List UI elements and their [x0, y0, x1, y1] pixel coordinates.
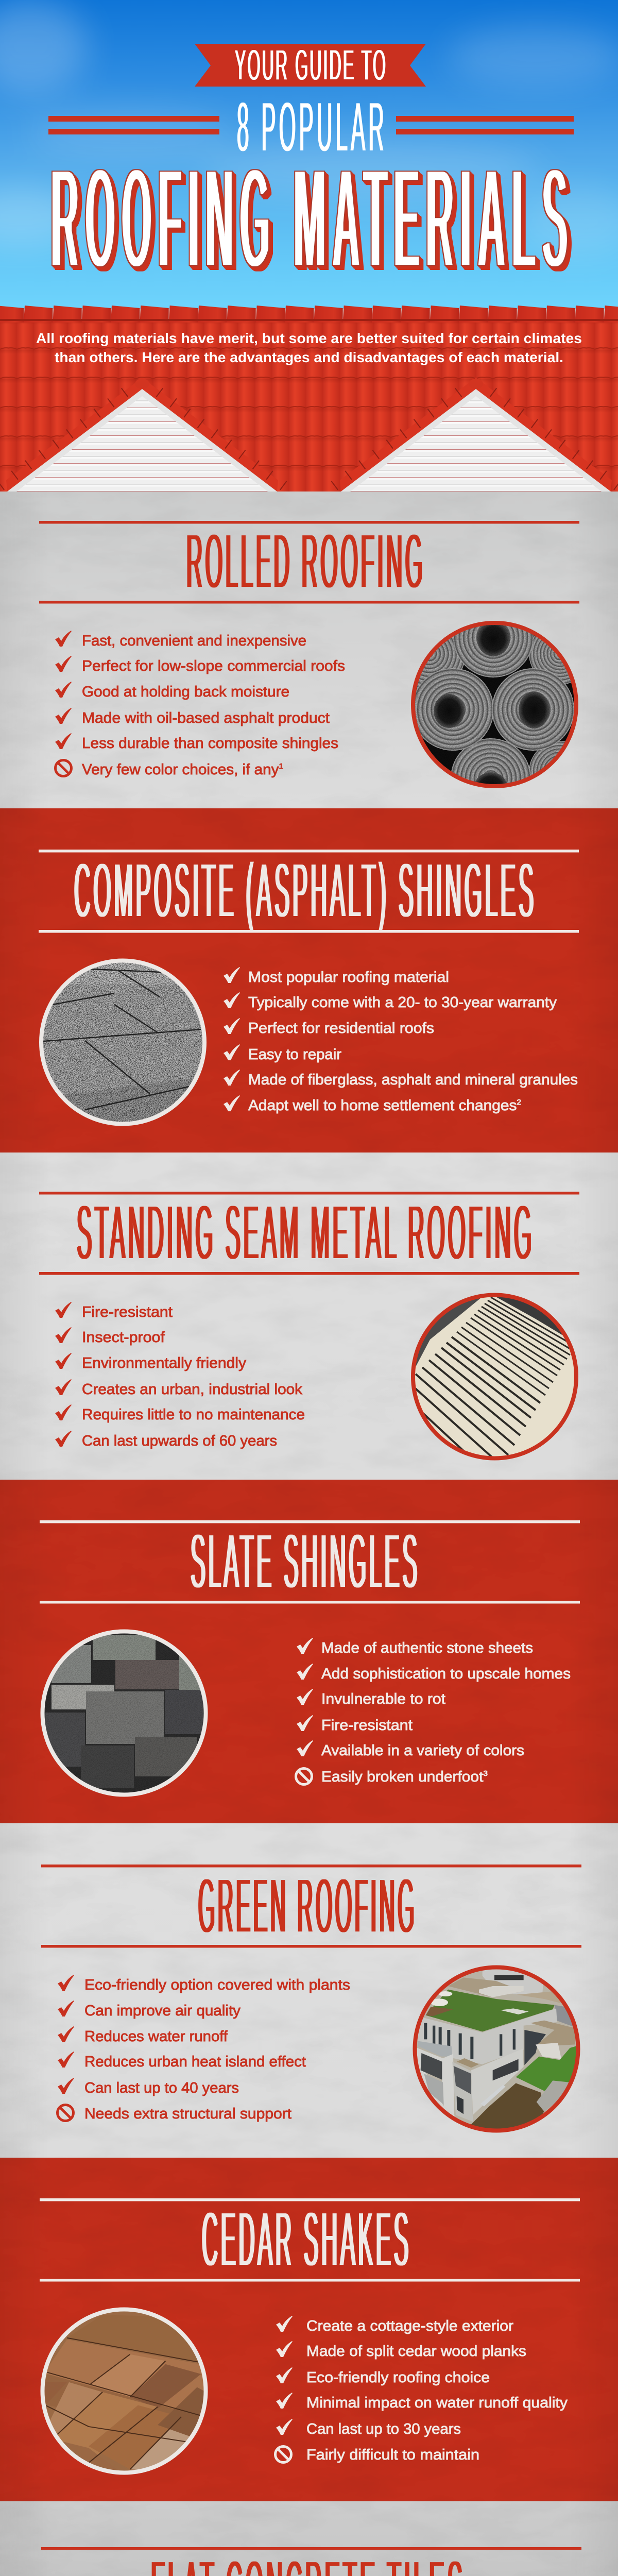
list: composite shingles pros: Perfect for residential roofs	[248, 1020, 434, 1037]
photo: standing seam metal	[411, 1293, 578, 1460]
list: standing seam pros: Insect-proof	[82, 1329, 165, 1346]
panel: sky header	[0, 0, 618, 309]
panel: cedar shakes	[40, 2195, 580, 2479]
list: green roofing pros and cons: Reduces water runoff	[84, 2028, 228, 2045]
list: rolled roofing pros and cons: Less durable than composite shingles	[82, 735, 338, 752]
panel: flat concrete tiles	[41, 2544, 583, 2576]
list: slate pros and cons: Fire-resistant	[321, 1717, 413, 1734]
intro text	[36, 330, 582, 365]
list: green roofing pros and cons: Can last up to 40 years	[84, 2080, 239, 2096]
heading: rolled roofing	[39, 517, 579, 604]
list: slate pros and cons: Add sophistication to upscale homes	[321, 1666, 571, 1682]
panel: slate shingles	[40, 1517, 580, 1797]
list: green roofing pros and cons: Can improve air quality	[84, 2003, 241, 2019]
list: standing seam pros: Can last upwards of 60 years	[82, 1433, 277, 1449]
list: green roofing pros and cons	[58, 1975, 350, 2122]
list: standing seam pros: Fire-resistant	[82, 1304, 173, 1320]
list: composite shingles pros: Made of fiberglass, asphalt and mineral granules	[248, 1072, 578, 1088]
list: rolled roofing pros and cons: Perfect for low-slope commercial roofs	[82, 658, 345, 674]
photo: slate tiles	[41, 1630, 208, 1797]
list: rolled roofing pros and cons: Fast, convenient and inexpensive	[82, 633, 306, 649]
title: 8 popular with side rules	[48, 88, 574, 166]
list: rolled roofing pros and cons: 1	[279, 762, 283, 771]
heading: slate shingles	[40, 1517, 580, 1604]
heading: cedar shakes	[40, 2195, 580, 2282]
list: slate pros and cons: Easily broken underfoot	[321, 1769, 478, 1785]
list: cedar shakes pros and cons: Fairly difficult to maintain	[306, 2447, 479, 2463]
list: cedar shakes pros and cons	[275, 2316, 568, 2463]
list: cedar shakes pros and cons: Can last up to 30 years	[306, 2421, 461, 2437]
photo: cedar shakes	[40, 2305, 209, 2479]
photo: rolled roofing	[411, 621, 578, 788]
list: green roofing pros and cons: Eco-friendly option covered with plants	[84, 1977, 350, 1993]
list: rolled roofing pros and cons: Good at holding back moisture	[82, 684, 289, 700]
list: cedar shakes pros and cons: Eco-friendly roofing choice	[306, 2369, 490, 2386]
list: slate pros and cons: 3	[483, 1769, 488, 1778]
photo: green roof building	[407, 1960, 585, 2138]
list: slate pros and cons	[296, 1638, 571, 1785]
list: composite shingles pros: Most popular roofing material	[248, 969, 449, 986]
panel: standing seam metal roofing	[39, 1189, 579, 1479]
intro text: than others. Here are the advantages and disadvantages of each material.	[55, 349, 563, 365]
list: composite shingles pros: Typically come with a 20- to 30-year warranty	[248, 994, 557, 1011]
title ribbon: your guide to	[195, 41, 426, 89]
list: standing seam pros: Environmentally friendly	[82, 1355, 247, 1371]
panel: green roofing	[41, 1862, 585, 2138]
list: composite shingles pros	[224, 967, 578, 1114]
list: composite shingles pros: Adapt well to home settlement changes	[248, 1097, 509, 1114]
list: composite shingles pros: 2	[517, 1098, 521, 1107]
list: cedar shakes pros and cons: Made of split cedar wood planks	[306, 2343, 526, 2360]
list: standing seam pros	[55, 1302, 305, 1449]
list: green roofing pros and cons: Needs extra structural support	[84, 2106, 291, 2122]
panel: rolled roofing	[39, 521, 579, 788]
heading: green roofing	[41, 1862, 581, 1949]
list: slate pros and cons: Available in a variety of colors	[321, 1742, 524, 1759]
photo: asphalt shingles	[39, 959, 207, 1128]
intro text: All roofing materials have merit, but some are better suited for certain climates	[36, 330, 582, 346]
list: rolled roofing pros and cons: Made with oil-based asphalt product	[82, 710, 330, 726]
list: green roofing pros and cons: Reduces urban heat island effect	[84, 2054, 306, 2070]
list: standing seam pros: Creates an urban, industrial look	[82, 1381, 303, 1398]
list: rolled roofing pros and cons: Very few color choices, if any	[82, 761, 274, 778]
list: cedar shakes pros and cons: Create a cottage-style exterior	[306, 2318, 513, 2334]
list: composite shingles pros: Easy to repair	[248, 1046, 341, 1063]
list: slate pros and cons: Made of authentic stone sheets	[321, 1640, 533, 1656]
list: slate pros and cons: Invulnerable to rot	[321, 1691, 445, 1707]
list: rolled roofing pros and cons	[55, 631, 345, 778]
list: cedar shakes pros and cons: Minimal impact on water runoff quality	[306, 2395, 568, 2411]
list: standing seam pros: Requires little to no maintenance	[82, 1406, 305, 1423]
panel: composite asphalt shingles	[39, 846, 579, 1128]
roof illustration	[0, 304, 618, 492]
